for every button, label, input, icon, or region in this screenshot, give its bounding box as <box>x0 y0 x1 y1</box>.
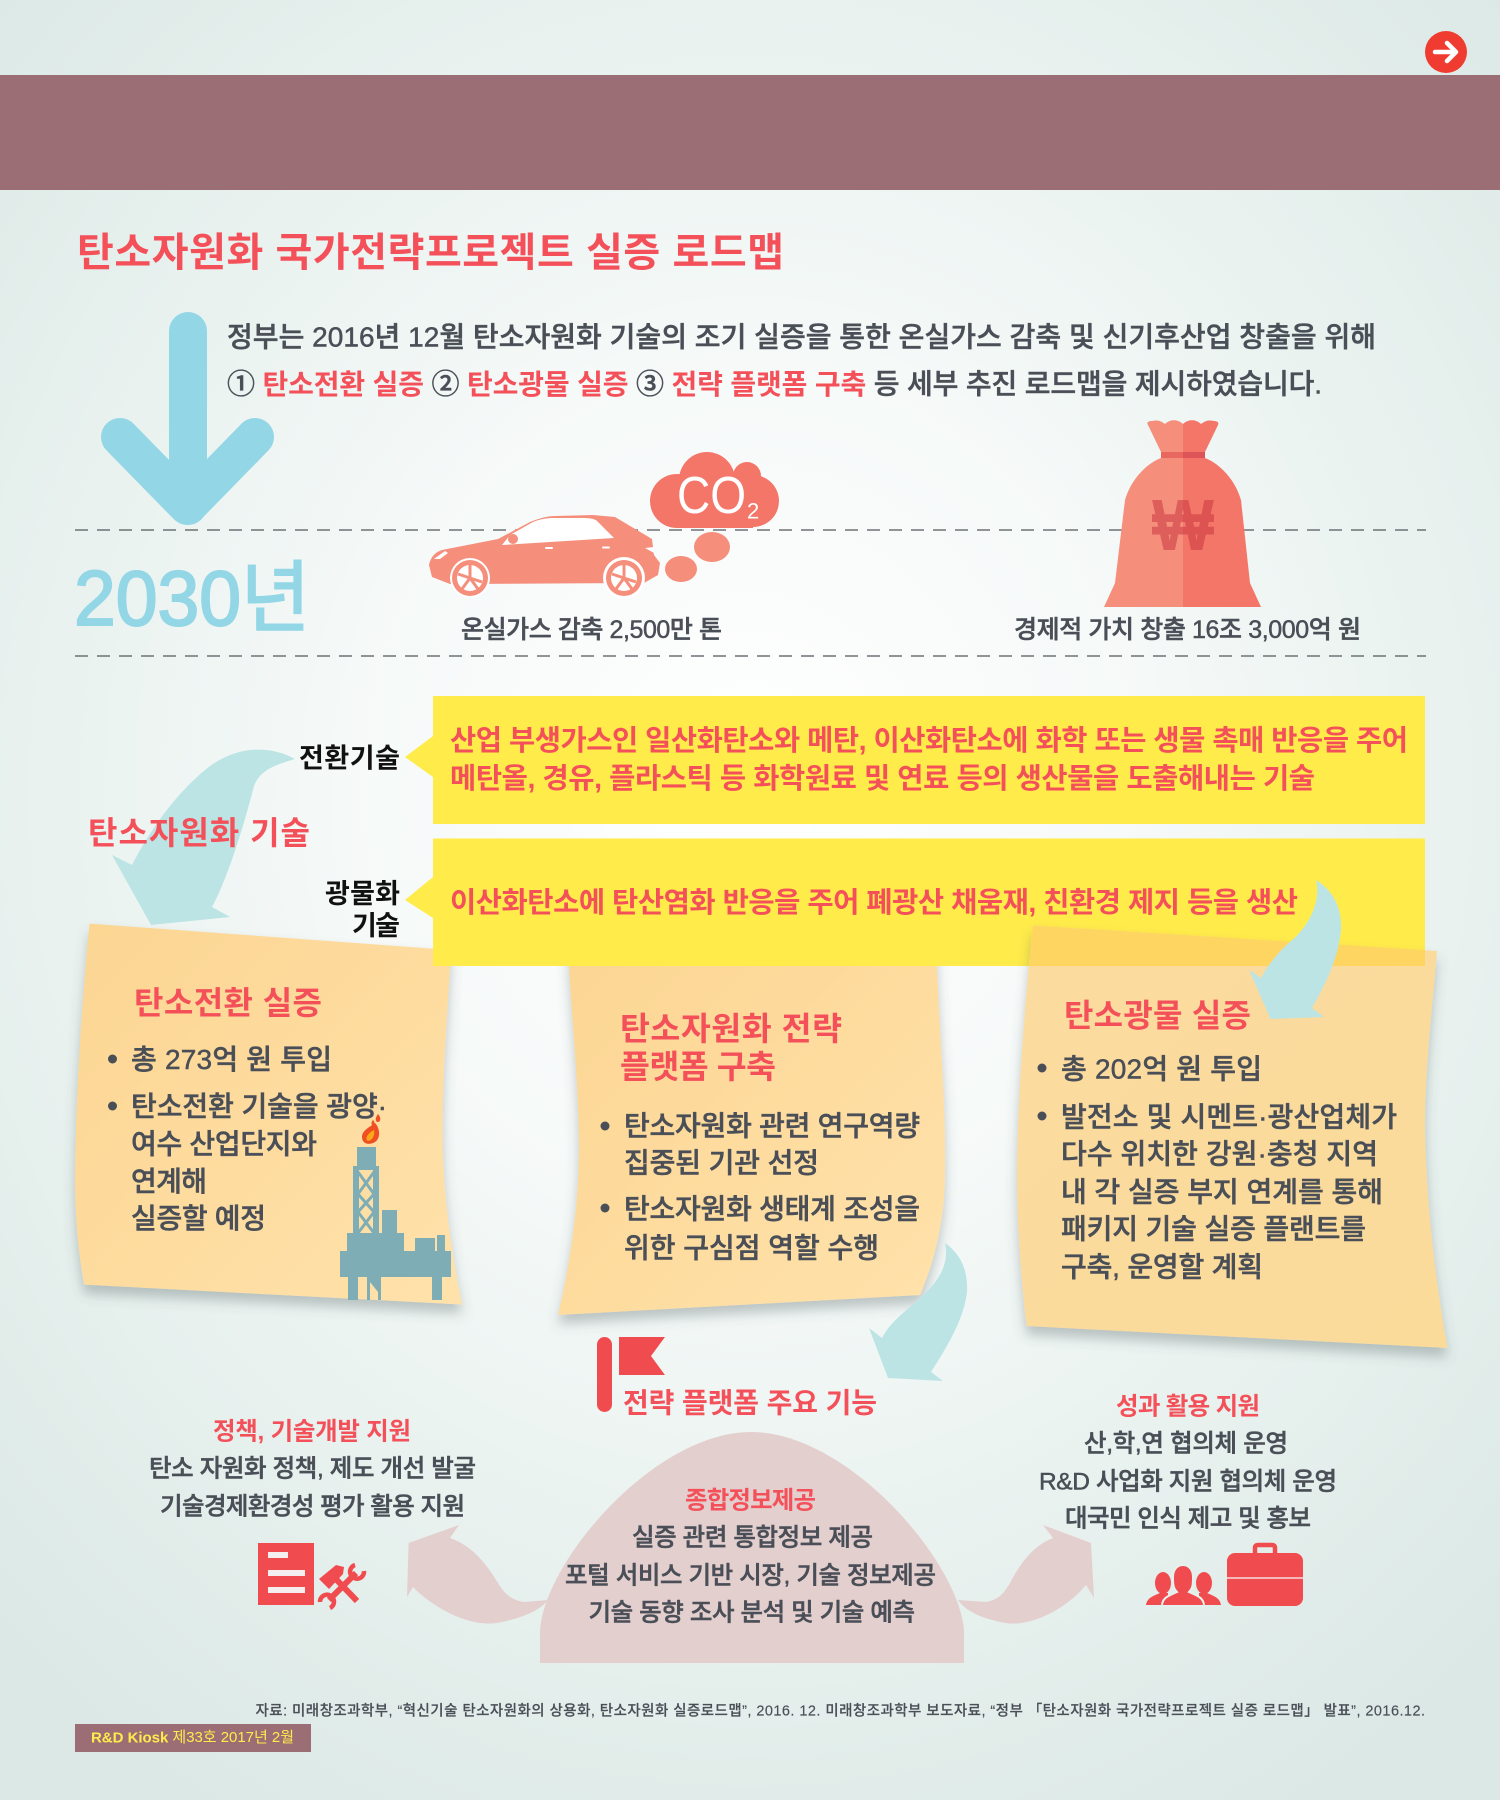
note body: 실증할 예정 <box>131 1203 266 1234</box>
panel: dome information <box>540 1432 964 1663</box>
note heading: 탄소전환 실증 <box>134 985 322 1021</box>
panel: results support text <box>1039 1392 1337 1532</box>
panel: dome information: 기술 동향 조사 분석 및 기술 예측 <box>588 1598 915 1626</box>
note: strategic platform <box>558 930 945 1315</box>
panel: policy support text: 탄소 자원화 정책, 제도 개선 발굴 <box>149 1454 476 1482</box>
icon: oil rig <box>340 1114 451 1300</box>
note body <box>1038 1054 1397 1282</box>
panel: results support text: 성과 활용 지원 <box>1116 1392 1260 1420</box>
icon: CO2 cloud: CO <box>677 467 746 525</box>
note body: 위한 구심점 역할 수행 <box>624 1232 879 1264</box>
arrow: to mineralization note <box>1249 880 1341 1019</box>
label: mineralization technology: 기술 <box>352 911 400 941</box>
panel: results support text: 대국민 인식 제고 및 홍보 <box>1065 1504 1311 1532</box>
note body: 총 273억 원 투입 <box>131 1044 332 1075</box>
note body: 탄소자원화 관련 연구역량 <box>624 1110 920 1142</box>
panel: conversion definition: 산업 부생가스인 일산화탄소와 메탄, 이산화탄소에 화학 또는 생물 촉매 반응을 주어 <box>450 725 1408 757</box>
intro text: ① 탄소전환 실증 ② 탄소광물 실증 ③ 전략 플랫폼 구축 등 세부 추진 로드맵을 제시하였습니다. <box>227 368 1322 400</box>
icon: tools <box>319 1565 364 1608</box>
label: conversion technology: 전환기술 <box>299 744 400 774</box>
note heading: 플랫폼 구축 <box>620 1049 776 1085</box>
icon: exhaust puffs <box>665 532 730 582</box>
icon: next arrow button <box>1425 31 1467 73</box>
icon: flag <box>597 1337 665 1412</box>
panel: results support text: 산,학,연 협의체 운영 <box>1084 1430 1288 1458</box>
note body: 총 202억 원 투입 <box>1061 1054 1262 1084</box>
footer badge <box>75 1724 311 1752</box>
icon: CO2 cloud: 2 <box>747 498 759 524</box>
note body: 연계해 <box>131 1166 207 1197</box>
label: mineralization technology: 광물화 <box>325 879 400 909</box>
panel: dome information: 포털 서비스 기반 시장, 기술 정보제공 <box>565 1562 936 1590</box>
note heading <box>620 1011 842 1085</box>
title: 탄소자원화 국가전략프로젝트 실증 로드맵 <box>77 231 784 275</box>
source note: 자료: 미래창조과학부, “혁신기술 탄소자원화의 상용화, 탄소자원화 실증로드맵”, 2016. 12. 미래창조과학부 보도자료, “정부 「탄소자원화 국가전략프로젝트 실증 로드맵」 발표”, 2016.12. <box>256 1702 1425 1720</box>
heading: platform functions: 전략 플랫폼 주요 기능 <box>623 1388 877 1418</box>
footer badge: R&D Kiosk 제33호 2017년 2월 <box>91 1729 294 1746</box>
intro text <box>227 322 1376 400</box>
icon: big down arrow <box>120 331 255 506</box>
note body: 다수 위치한 강원·충청 지역 <box>1061 1138 1378 1170</box>
note body: 탄소자원화 생태계 조성을 <box>624 1194 920 1224</box>
note body: 집중된 기관 선정 <box>624 1148 819 1178</box>
arrow: right function <box>958 1525 1094 1624</box>
panel: conversion definition <box>405 696 1425 824</box>
note body <box>600 1110 920 1264</box>
panel: mineralization definition <box>405 838 1425 966</box>
icon: car <box>429 515 660 599</box>
label: economic value: 경제적 가치 창출 16조 3,000억 원 <box>1014 616 1361 644</box>
panel: mineralization definition: 이산화탄소에 탄산염화 반응을 주어 폐광산 채움재, 친환경 제지 등을 생산 <box>450 887 1298 919</box>
dashed line bottom <box>75 655 1426 657</box>
icon: CO2 cloud <box>650 452 779 528</box>
intro text: 정부는 2016년 12월 탄소자원화 기술의 조기 실증을 통한 온실가스 감축 및 신기후산업 창출을 위해 <box>227 322 1376 352</box>
icon: briefcase <box>1227 1545 1303 1606</box>
note heading: 탄소광물 실증 <box>1064 998 1251 1034</box>
arrow: platform to functions <box>869 1243 967 1381</box>
note body: 패키지 기술 실증 플랜트를 <box>1061 1214 1366 1244</box>
note heading: 탄소자원화 전략 <box>620 1011 842 1047</box>
panel: policy support text: 기술경제환경성 평가 활용 지원 <box>160 1492 465 1520</box>
arrow: technology to notes <box>112 750 295 925</box>
header band <box>0 75 1500 190</box>
label: greenhouse gas reduction: 온실가스 감축 2,500만 톤 <box>461 616 722 644</box>
heading: carbon resource technology: 탄소자원화 기술 <box>88 815 310 851</box>
arrow: left function <box>407 1525 548 1624</box>
icon: money bag <box>1104 420 1261 607</box>
panel: dome information: 실증 관련 통합정보 제공 <box>632 1524 873 1552</box>
panel: policy support text: 정책, 기술개발 지원 <box>213 1418 411 1446</box>
note: carbon mineralization <box>1017 926 1448 1348</box>
note body <box>108 1044 387 1234</box>
icon: people <box>1146 1565 1221 1606</box>
note body: 탄소전환 기술을 광양· <box>131 1091 387 1122</box>
panel: conversion definition: 메탄올, 경유, 플라스틱 등 화학원료 및 연료 등의 생산물을 도출해내는 기술 <box>450 763 1315 795</box>
panel: dome information: 종합정보제공 <box>685 1486 816 1514</box>
note body: 구축, 운영할 계획 <box>1061 1252 1263 1282</box>
year 2030: 2030년 <box>74 554 310 642</box>
panel: policy support text <box>149 1418 476 1520</box>
note body: 발전소 및 시멘트·광산업체가 <box>1061 1102 1397 1132</box>
label: mineralization technology <box>325 879 400 941</box>
dashed line top <box>75 529 1426 531</box>
note: carbon conversion <box>75 924 462 1304</box>
panel: results support text: R&D 사업화 지원 협의체 운영 <box>1039 1468 1337 1496</box>
note body: 여수 산업단지와 <box>131 1128 317 1160</box>
note body: 내 각 실증 부지 연계를 통해 <box>1061 1176 1383 1208</box>
icon: document <box>258 1543 314 1605</box>
icon: money bag: ₩ <box>1152 486 1214 566</box>
